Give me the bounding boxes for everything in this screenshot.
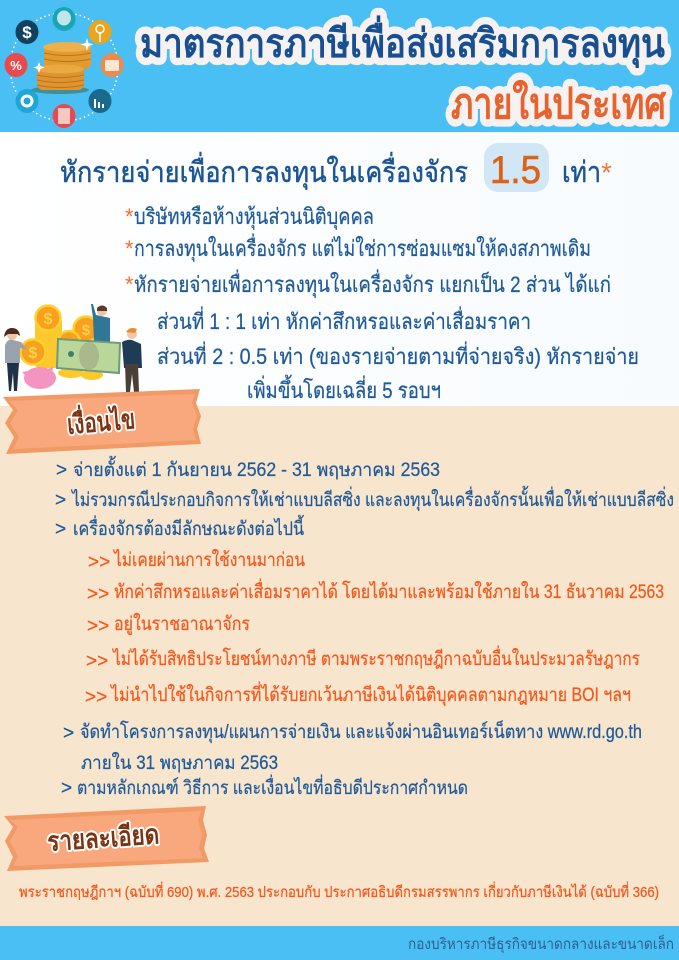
heading: deduction 1.5 times: 1.5 (490, 149, 541, 192)
text block: eligibility notes: * (125, 272, 134, 297)
text block: eligibility notes: หักรายจ่ายเพื่อการลงทุนในเครื่องจักร แยกเป็น 2 ส่วน ได้แก่ (134, 269, 611, 298)
text block: conditions list: >> (86, 651, 108, 672)
text block: eligibility notes: * (125, 204, 134, 229)
text block: conditions list: ตามหลักเกณฑ์ วิธีการ และเงื่อนไขที่อธิบดีประกาศกำหนด (77, 774, 468, 799)
ribbon: details heading: รายละเอียด (46, 819, 160, 857)
panel: header band (0, 0, 679, 132)
text block: eligibility notes: เพิ่มขึ้นโดยเฉลี่ย 5 รอบฯ (247, 375, 441, 403)
illustration: people with coins and banknote (4, 304, 142, 392)
heading: deduction 1.5 times: * (601, 157, 612, 188)
illustration: people with coins and banknote: $ (29, 345, 38, 362)
text block: eligibility notes: ส่วนที่ 1 : 1 เท่า หักค่าสึกหรอและค่าเสื่อมราคา (157, 306, 531, 334)
text block: conditions list (55, 456, 674, 799)
text block: conditions list: อยู่ในราชอาณาจักร (114, 613, 250, 635)
icon: coins and finance ring (4, 7, 124, 121)
panel: white intro section (0, 132, 679, 406)
illustration: people with coins and banknote: $ (82, 322, 91, 339)
text block: conditions list: จ่ายตั้งแต่ 1 กันยายน 2562 - 31 พฤษภาคม 2563 (73, 456, 440, 481)
text block: conditions list: > (55, 490, 66, 511)
text block: conditions list: ภายใน 31 พฤษภาคม 2563 (81, 752, 278, 774)
text block: conditions list: > (55, 519, 66, 540)
heading: deduction 1.5 times: หักรายจ่ายเพื่อการลงทุนในเครื่องจักร (60, 152, 468, 190)
text block: conditions list: >> (88, 552, 110, 573)
icon: calculator badge (52, 104, 76, 128)
text block: eligibility notes (125, 204, 639, 403)
text block: eligibility notes: ส่วนที่ 2 : 0.5 เท่า (ของรายจ่ายตามที่จ่ายจริง) หักรายจ่าย (157, 341, 639, 369)
ribbon: conditions heading: เงื่อนไข (65, 399, 136, 440)
icon: coins and finance ring: $ (22, 23, 32, 42)
text block: conditions list: >> (87, 584, 109, 605)
text block: conditions list: > (61, 778, 72, 799)
title (140, 15, 667, 127)
ribbon: conditions heading (3, 389, 201, 454)
text block: conditions list: ไม่เคยผ่านการใช้งานมาก่อน (112, 549, 305, 571)
illustration: people with coins and banknote: $ (44, 311, 53, 328)
text block: conditions list: เครื่องจักรต้องมีลักษณะดังต่อไปนี้ (73, 515, 304, 540)
text block: eligibility notes: บริษัทหรือห้างหุ้นส่วนนิติบุคคล (134, 204, 374, 230)
text block: conditions list: > (63, 723, 74, 744)
text block: conditions list: >> (87, 616, 109, 637)
text block: conditions list: > (56, 460, 67, 481)
text block: conditions list: >> (85, 687, 107, 708)
panel: conditions section (0, 406, 679, 926)
heading: deduction 1.5 times: เท่า (562, 157, 601, 189)
text block: eligibility notes: * (125, 236, 134, 261)
icon: coins and finance ring: % (10, 58, 22, 73)
panel: footer band (0, 926, 679, 960)
ribbon: details heading (4, 806, 209, 871)
heading: deduction 1.5 times (60, 143, 612, 192)
